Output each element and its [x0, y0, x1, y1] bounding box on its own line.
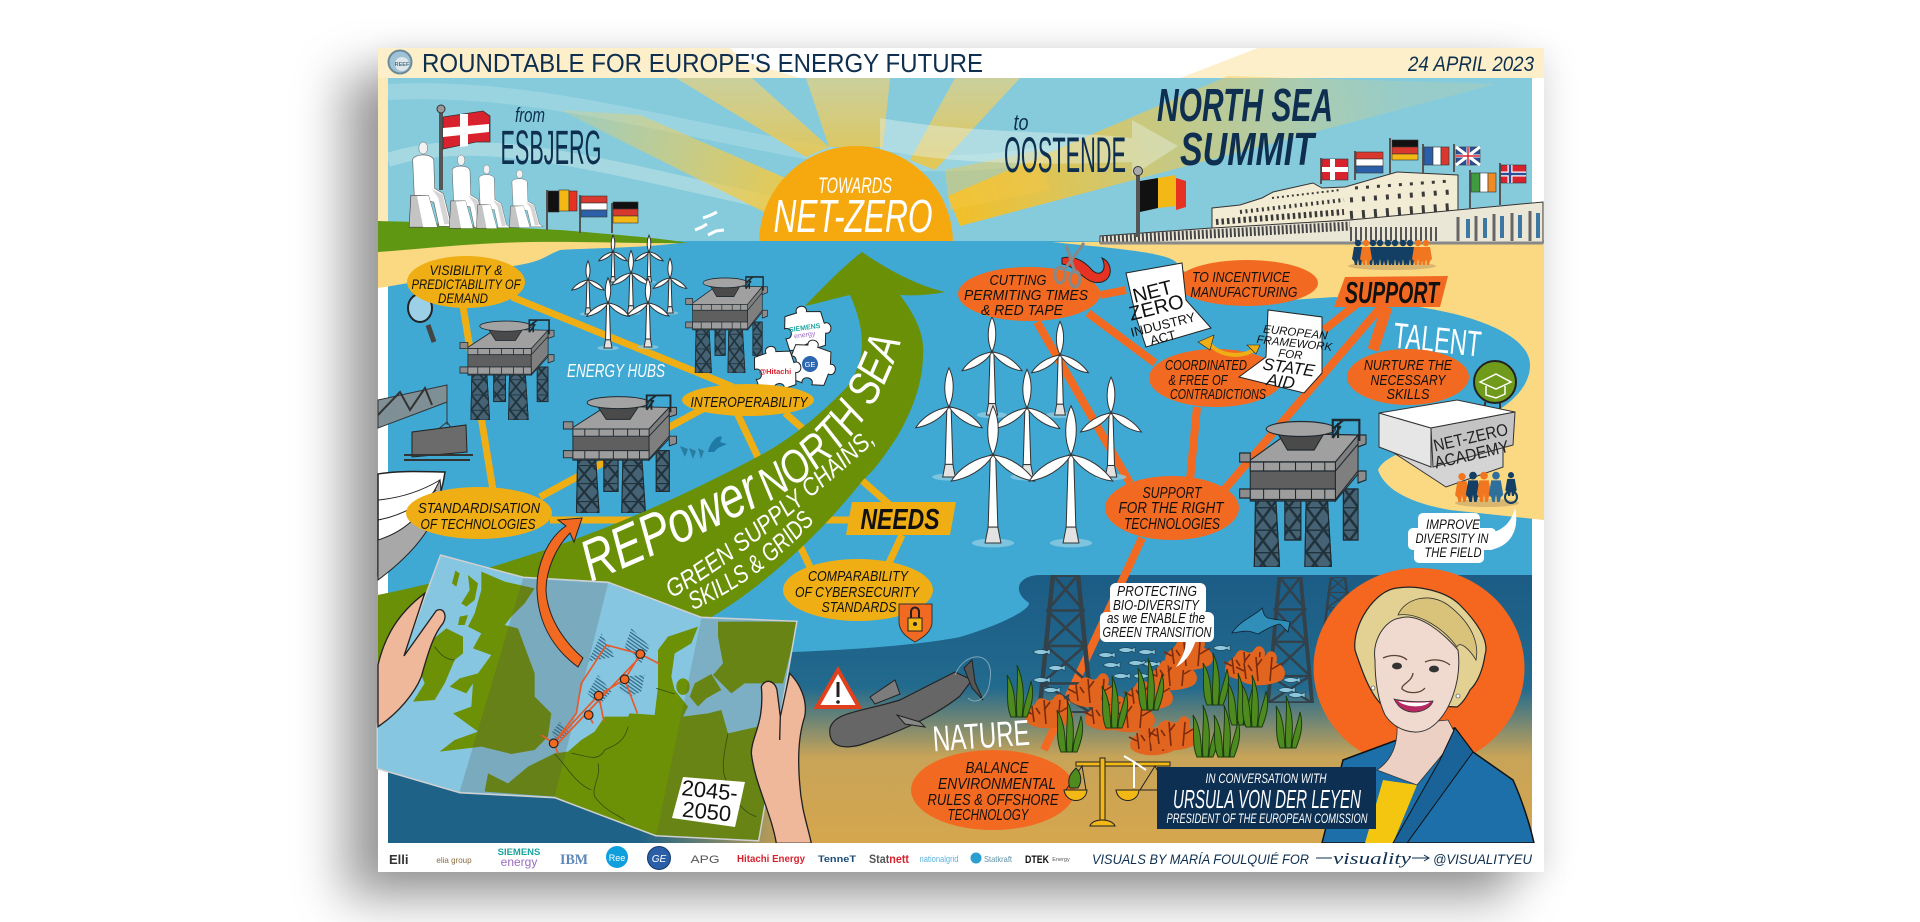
energy hub platforms — [460, 277, 767, 513]
logo: Ree — [606, 846, 628, 868]
oval: standardisation — [406, 487, 552, 539]
map grid lines — [541, 645, 660, 753]
needs network links — [462, 297, 902, 567]
oval: cutting permitting — [958, 267, 1100, 321]
name plate: PRESIDENT OF THE EUROPEAN COMISSION — [1166, 811, 1368, 826]
logo: Elia group: elia group — [436, 856, 472, 865]
double arrow — [1198, 335, 1260, 355]
icon: lock shield — [899, 604, 932, 642]
from Esbjerg label: from — [515, 105, 545, 127]
oval: coordinated — [1149, 349, 1283, 407]
flag: Netherlands — [1356, 152, 1383, 173]
oval: support right technologies: TECHNOLOGIES — [1124, 516, 1221, 533]
arrow from Esbjerg to Oostende — [880, 118, 1178, 176]
label: 2045-2050 — [672, 775, 745, 827]
document: State Aid framework — [1239, 310, 1334, 393]
oval: support right technologies: SUPPORT — [1142, 485, 1203, 502]
header band — [378, 48, 1544, 78]
flag: Germany — [1392, 140, 1418, 160]
logo: Hitachi Energy: Hitachi Energy — [737, 853, 805, 865]
oval: visibility: PREDICTABILITY OF — [412, 277, 521, 292]
bubble: improve diversity: DIVERSITY IN — [1416, 530, 1489, 546]
coral reef — [1024, 636, 1285, 755]
name plate: IN CONVERSATION WITH — [1206, 770, 1327, 786]
logo: GE: GE — [652, 854, 667, 865]
banner: support: SUPPORT — [1345, 275, 1441, 310]
oval: balance — [911, 750, 1075, 830]
oval: standardisation: STANDARDISATION — [418, 500, 540, 517]
document: Net Zero Industry Act: NET — [1130, 277, 1175, 308]
flag: Denmark pole and flag — [437, 105, 490, 190]
hair fringe — [1398, 598, 1477, 660]
warning sign — [817, 670, 859, 707]
oval: nurture skills — [1347, 349, 1469, 405]
oval: interoperability — [682, 384, 814, 416]
bubble: protecting biodiversity: PROTECTING — [1117, 584, 1197, 600]
logo: TenneT: TenneT — [818, 854, 856, 865]
document: State Aid framework: AID — [1264, 370, 1296, 393]
people group — [1455, 472, 1519, 507]
oval: standardisation: OF TECHNOLOGIES — [420, 516, 536, 533]
date: 24 APRIL 2023 — [1407, 53, 1534, 76]
support network links — [1037, 285, 1387, 750]
bubble: protecting biodiversity — [1100, 583, 1214, 667]
long right ray — [948, 76, 1496, 226]
low right ray — [945, 150, 1050, 210]
oval: cutting permitting: PERMITING TIMES — [964, 287, 1088, 304]
map hubs — [549, 650, 645, 748]
nature heading: NATURE — [931, 712, 1031, 759]
logo: IBM: IBM — [560, 852, 588, 868]
earrings — [1371, 686, 1460, 698]
heading: North Sea Summit: NORTH SEA — [1157, 79, 1333, 131]
net-zero: NET-ZERO — [774, 190, 932, 242]
seaweed — [1007, 653, 1302, 757]
puzzle: Hitachi: @Hitachi — [759, 367, 791, 376]
magnifier — [408, 294, 434, 342]
face — [1375, 617, 1459, 732]
oval: coordinated: & FREE OF — [1168, 373, 1228, 389]
Oostende label — [1004, 110, 1126, 183]
beach right — [1052, 240, 1544, 520]
academy sign text: ACADEMY — [1433, 437, 1511, 472]
text: ESBJERG — [500, 122, 602, 175]
sky swooshes — [388, 91, 1060, 205]
puzzle pieces — [751, 303, 840, 393]
right hand — [751, 673, 811, 843]
icon: balance scales — [1064, 756, 1170, 826]
logo: DTEK: DTEK — [1025, 854, 1049, 866]
left ray — [560, 110, 790, 215]
oval: balance: BALANCE — [966, 760, 1029, 777]
footer credits: @VISUALITYEU — [1433, 851, 1533, 867]
icon: scissors and red tape — [1055, 243, 1110, 287]
bubble: improve diversity: THE FIELD — [1424, 544, 1482, 560]
flag: Belgium large — [1134, 166, 1186, 237]
map sea — [378, 550, 811, 850]
logo: DTEK — [1025, 854, 1070, 866]
logo: Siemens Energy — [498, 847, 540, 869]
crane barge — [378, 385, 473, 460]
footer band — [378, 843, 1544, 872]
oval: visibility — [407, 256, 525, 308]
flag: Denmark — [1322, 159, 1348, 180]
document: Net Zero Industry Act: ACT — [1148, 327, 1177, 348]
oval: incentivise manufacturing — [1176, 260, 1318, 306]
oval: cutting permitting: & RED TAPE — [981, 302, 1064, 319]
logo: Elli: Elli — [389, 852, 409, 867]
oval: coordinated: COORDINATED — [1165, 358, 1247, 374]
label: 2045-2050: 2050 — [681, 797, 732, 827]
neck and chest — [1377, 720, 1457, 785]
icon: graduation cap sign — [1474, 361, 1516, 412]
bubble: protecting biodiversity: GREEN TRANSITION — [1102, 625, 1212, 641]
bubble: improve diversity: IMPROVE — [1426, 516, 1481, 532]
ship hull — [378, 472, 445, 580]
oval: support right technologies: FOR THE RIGHT — [1118, 500, 1225, 517]
document: Net Zero Industry Act: INDUSTRY — [1129, 309, 1197, 340]
flag: France — [1424, 147, 1449, 165]
logo: DTEK: Energy — [1052, 857, 1070, 863]
oval: nurture skills: NURTURE THE — [1364, 357, 1453, 374]
logo: GE — [648, 846, 670, 870]
oval: nurture skills: NECESSARY — [1370, 372, 1446, 389]
oval: visibility: VISIBILITY & — [430, 263, 502, 278]
Net-Zero Academy building — [1379, 400, 1515, 487]
eyes — [1392, 663, 1439, 672]
footer logos — [389, 846, 1070, 870]
left hand — [378, 593, 445, 727]
bubble: protecting biodiversity: BIO-DIVERSITY — [1113, 598, 1200, 614]
smile — [1394, 699, 1433, 712]
academy sign text: NET-ZERO — [1432, 420, 1510, 455]
map hatching: wind zones — [551, 628, 650, 740]
text: OOSTENDE — [1004, 127, 1126, 183]
footer credits — [1092, 849, 1533, 868]
crowd on beach — [1348, 240, 1436, 270]
hair — [1355, 587, 1486, 707]
oval: comparability: OF CYBERSECURITY — [795, 584, 920, 601]
footer credits: VISUALS BY MARÍA FOULQUIÉ FOR — [1092, 851, 1309, 867]
REEF logo: REEF — [395, 62, 410, 68]
document: Net Zero Industry Act: ZERO — [1127, 291, 1186, 326]
logo: Siemens Energy: SIEMENS — [498, 847, 540, 858]
oval: comparability — [783, 559, 933, 621]
orange disc — [1314, 568, 1524, 768]
left wind farm — [571, 235, 688, 350]
oval: interoperability: INTEROPERABILITY — [690, 394, 808, 411]
map fold panels — [460, 578, 608, 797]
blouse — [1365, 780, 1417, 843]
REPower: REPower — [582, 475, 755, 581]
Oostende label: to — [1014, 110, 1028, 135]
map land — [413, 571, 798, 847]
curved red arrow — [537, 518, 583, 667]
oval: coordinated: CONTRADICTIONS — [1170, 387, 1266, 403]
right wind farm — [914, 317, 1143, 547]
logo: Statkraft — [970, 852, 1013, 864]
flag: Ireland — [1471, 173, 1496, 192]
oval: cutting permitting: CUTTING — [990, 272, 1047, 289]
fish school — [1033, 645, 1305, 698]
poster card — [378, 48, 1544, 872]
sea — [388, 241, 1532, 661]
lapel — [1393, 728, 1473, 843]
map — [378, 550, 811, 850]
statues: Men at Sea — [409, 142, 543, 228]
arrow text — [582, 337, 901, 609]
document: State Aid framework: EUROPEAN — [1263, 324, 1329, 342]
logo: APG: APG — [690, 854, 720, 866]
oval: nurture skills: SKILLS — [1386, 386, 1430, 403]
logo: National Grid: nationalgrid — [920, 854, 958, 864]
puzzle: Siemens Energy: energy — [794, 330, 816, 340]
oval: balance: ENVIRONMENTAL — [938, 776, 1056, 793]
document: State Aid framework: FRAMEWORK — [1256, 334, 1334, 354]
birds — [695, 212, 724, 235]
banner: needs: NEEDS — [860, 504, 940, 536]
puzzle: Siemens Energy — [782, 303, 834, 353]
banner: support — [1334, 275, 1448, 310]
submarine — [830, 657, 991, 747]
North Sea: NORTH SEA — [758, 337, 901, 501]
label: 2045-2050: 2045- — [680, 775, 739, 806]
map borders — [435, 647, 756, 820]
flag: UK — [1456, 147, 1480, 165]
small flags: Belgium Netherlands Germany — [547, 190, 638, 233]
talent heading: TALENT — [1391, 315, 1483, 365]
heading: North Sea Summit — [1157, 79, 1333, 175]
logo: Ree: Ree — [609, 853, 625, 863]
underwater lattice legs — [1039, 575, 1353, 713]
puzzle: Siemens Energy: SIEMENS — [789, 323, 821, 334]
puzzle: GE: GE — [805, 360, 815, 369]
oval: incentivise manufacturing: TO INCENTIVICE — [1192, 269, 1291, 286]
sun rays — [560, 76, 1496, 226]
title: ROUNDTABLE FOR EUROPE'S ENERGY FUTURE — [422, 48, 983, 78]
logo: Statnett: Statnett — [869, 852, 909, 866]
oval: incentivise manufacturing: MANUFACTURING — [1190, 284, 1298, 301]
oval: balance: RULES & OFFSHORE — [928, 792, 1059, 809]
bubble: protecting biodiversity: as we ENABLE the — [1107, 611, 1205, 627]
from Esbjerg label — [500, 105, 602, 175]
energy hubs label: ENERGY HUBS — [567, 361, 665, 381]
bubble: improve diversity — [1408, 508, 1516, 563]
logo: Statkraft: Statkraft — [984, 854, 1013, 864]
deep sea and sea bed — [388, 575, 1532, 843]
name plate: URSULA VON DER LEYEN — [1173, 784, 1361, 814]
oval: support right technologies — [1105, 476, 1239, 540]
skills and grids: SKILLS & GRIDS — [690, 510, 812, 609]
sand left shore — [378, 238, 686, 288]
name plate — [1157, 767, 1376, 829]
portrait: Ursula von der Leyen — [1314, 568, 1534, 843]
upper rays — [676, 78, 1020, 170]
big green arrow — [378, 252, 945, 720]
oval: comparability: COMPARABILITY — [808, 568, 909, 585]
towards: TOWARDS — [818, 173, 892, 198]
Kursaal building — [1100, 172, 1543, 243]
oval: balance: TECHNOLOGY — [948, 807, 1029, 824]
REEF logo — [388, 50, 412, 74]
document: State Aid framework: STATE — [1262, 355, 1317, 381]
heading: North Sea Summit: SUMMIT — [1180, 123, 1317, 175]
offshore substation right above water — [1240, 420, 1366, 567]
jacket — [1322, 728, 1534, 843]
land Esbjerg — [378, 221, 688, 252]
green supply chains: GREEN SUPPLY CHAINS, — [667, 434, 875, 596]
oval: visibility: DEMAND — [438, 291, 488, 306]
document: State Aid framework: FOR — [1278, 348, 1303, 362]
academy sign text — [1432, 420, 1511, 472]
flag: Norway — [1501, 165, 1526, 183]
sky — [388, 78, 1532, 242]
dolphin — [1232, 608, 1290, 634]
cream strip left of sky — [378, 78, 388, 223]
brows and nose — [1383, 656, 1450, 693]
document: Net Zero Industry Act — [1126, 263, 1211, 348]
oval: comparability: STANDARDS — [822, 599, 896, 616]
footer credits: visuality — [1333, 849, 1412, 868]
flags above building — [1321, 138, 1526, 208]
logo: Siemens Energy: energy — [501, 855, 537, 869]
sun: towards net-zero — [759, 146, 953, 241]
small dolphin and fins — [680, 436, 727, 459]
header sun-ray tint — [378, 48, 1544, 78]
